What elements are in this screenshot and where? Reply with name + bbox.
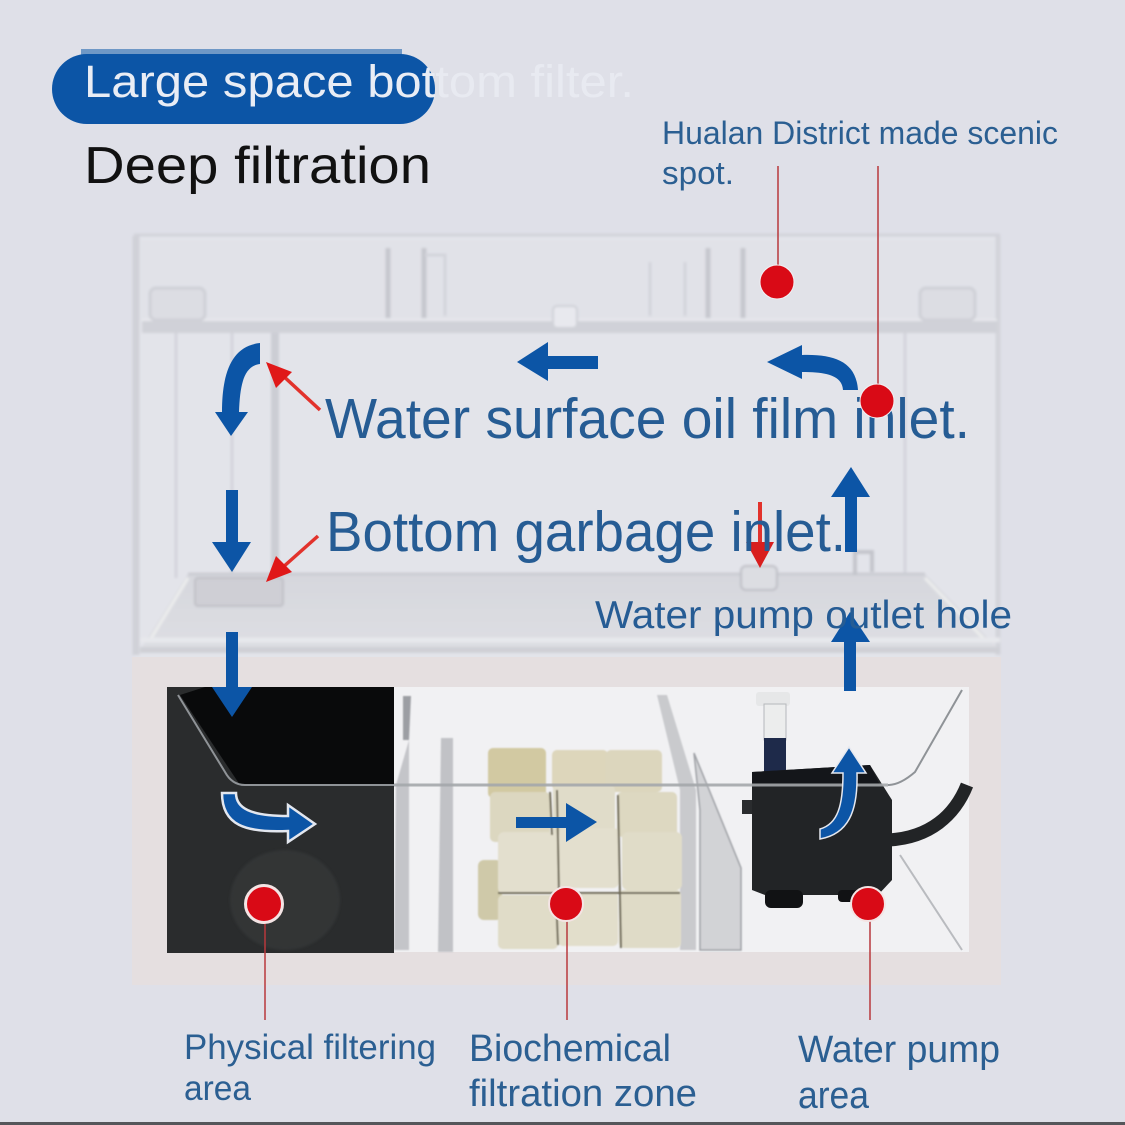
label: Water surface oil film inlet: Water surface oil film inlet.: [325, 387, 970, 451]
red arrow: to bottom garbage inlet: [266, 536, 318, 582]
label: Biochemical filtration zone: filtration zone: [469, 1073, 697, 1115]
title pill: Large space bottom filter: [52, 49, 634, 124]
blue flow arrows: [212, 342, 870, 842]
label: Biochemical filtration zone: [469, 1028, 697, 1115]
red arrow: to water surface inlet: [266, 362, 320, 410]
physical filter sponge: [167, 687, 394, 953]
arrow: top right curve left: [767, 345, 858, 390]
label: Hualan District made scenic spot: spot.: [662, 155, 734, 191]
label: Physical filtering area: area: [184, 1069, 252, 1108]
label: Water pump outlet hole: Water pump outlet hole: [595, 594, 1012, 637]
arrow: down into sponge: [212, 632, 252, 717]
label: Water pump area: area: [798, 1075, 870, 1117]
acrylic dividers: [394, 695, 741, 952]
label: Physical filtering area: [184, 1028, 436, 1108]
callout marker: surface inlet: [860, 166, 894, 418]
callout marker: physical filter: [246, 886, 282, 1020]
arrow: up right: [831, 467, 870, 552]
label: Bottom garbage inlet: Bottom garbage inlet.: [326, 500, 846, 564]
arrow: up pump outlet: [831, 612, 870, 691]
label: Water pump area: Water pump: [798, 1029, 1000, 1071]
lower tank frame: [132, 657, 1001, 985]
title pill: Large space bottom filter: Large space bot tom filter.: [84, 56, 634, 107]
arrow: bricks right: [516, 803, 597, 842]
water pump: [394, 690, 967, 950]
label: Water pump area: [798, 1029, 1000, 1117]
label: Biochemical filtration zone: Biochemical: [469, 1028, 671, 1070]
arrow: top left curve down: [215, 343, 260, 436]
label: Physical filtering area: Physical filtering: [184, 1028, 436, 1067]
callout marker: pump: [851, 887, 885, 1020]
biochemical filter bricks: [478, 748, 682, 949]
red arrow: pump outlet hole: [746, 502, 774, 568]
callout marker: biochemical: [549, 887, 583, 1020]
upper acrylic tank: [134, 234, 1000, 658]
arrow: curved up in pump: [820, 747, 866, 839]
callout marker: top lid: [760, 166, 794, 299]
arrow: sponge curve right: [222, 793, 315, 842]
label: Hualan District made scenic spot: Hualan District made scenic: [662, 115, 1058, 151]
arrow: left: [517, 342, 598, 381]
arrow: down: [212, 490, 251, 572]
heading: Deep filtration: Deep filtration: [84, 137, 431, 195]
label: Hualan District made scenic spot: [662, 115, 1058, 191]
